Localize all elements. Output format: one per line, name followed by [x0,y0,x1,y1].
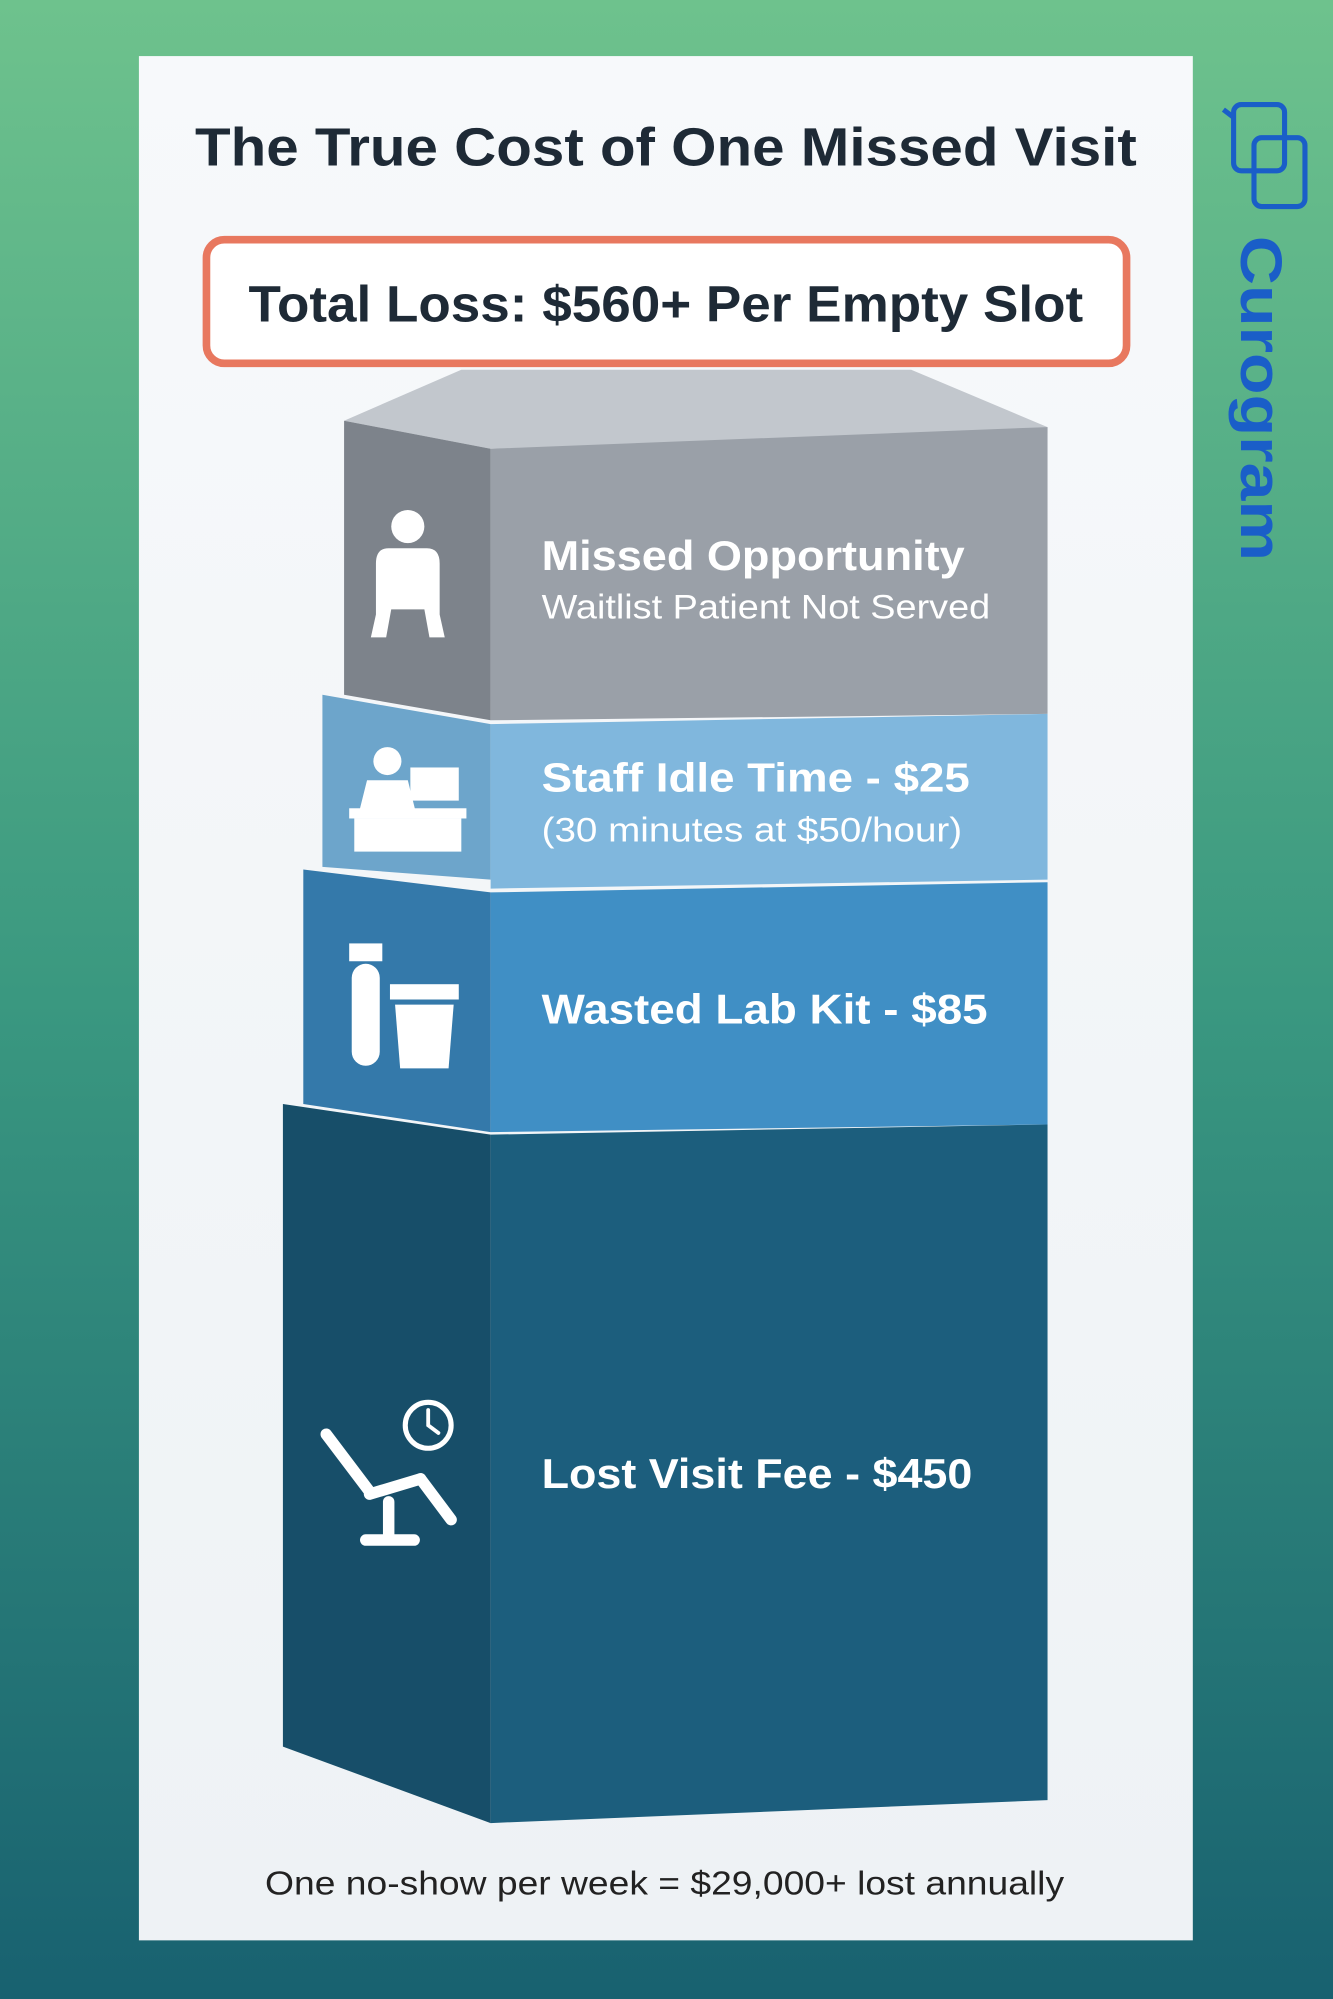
total loss callout: Total Loss: $560+ Per Empty Slot [249,275,1083,332]
logo: Curogram [1223,105,1305,561]
footer text: One no-show per week = $29,000+ lost annually [265,1865,1065,1902]
block: staff idle time [322,695,1048,889]
block: missed opportunity: Missed Opportunity [542,532,965,579]
block: missed opportunity [344,370,1048,720]
block: wasted lab kit [303,869,1048,1132]
icon: chair with clock [326,1402,451,1540]
block: wasted lab kit: Wasted Lab Kit - $85 [542,986,988,1033]
block: staff idle time: (30 minutes at $50/hour) [542,811,962,849]
block: lost visit fee: Lost Visit Fee - $450 [542,1450,972,1497]
block: lost visit fee [283,1104,1048,1823]
icon: staff at desk [349,747,466,852]
icon: lab tube and bio container [349,943,459,1068]
logo: Curogram: Curogram [1228,236,1293,561]
title: The True Cost of One Missed Visit [195,119,1137,178]
icon: seated patient [371,510,445,637]
total loss callout [206,240,1127,363]
card panel [139,56,1193,1940]
block: staff idle time: Staff Idle Time - $25 [542,755,970,801]
block: missed opportunity: Waitlist Patient Not Served [542,588,990,626]
